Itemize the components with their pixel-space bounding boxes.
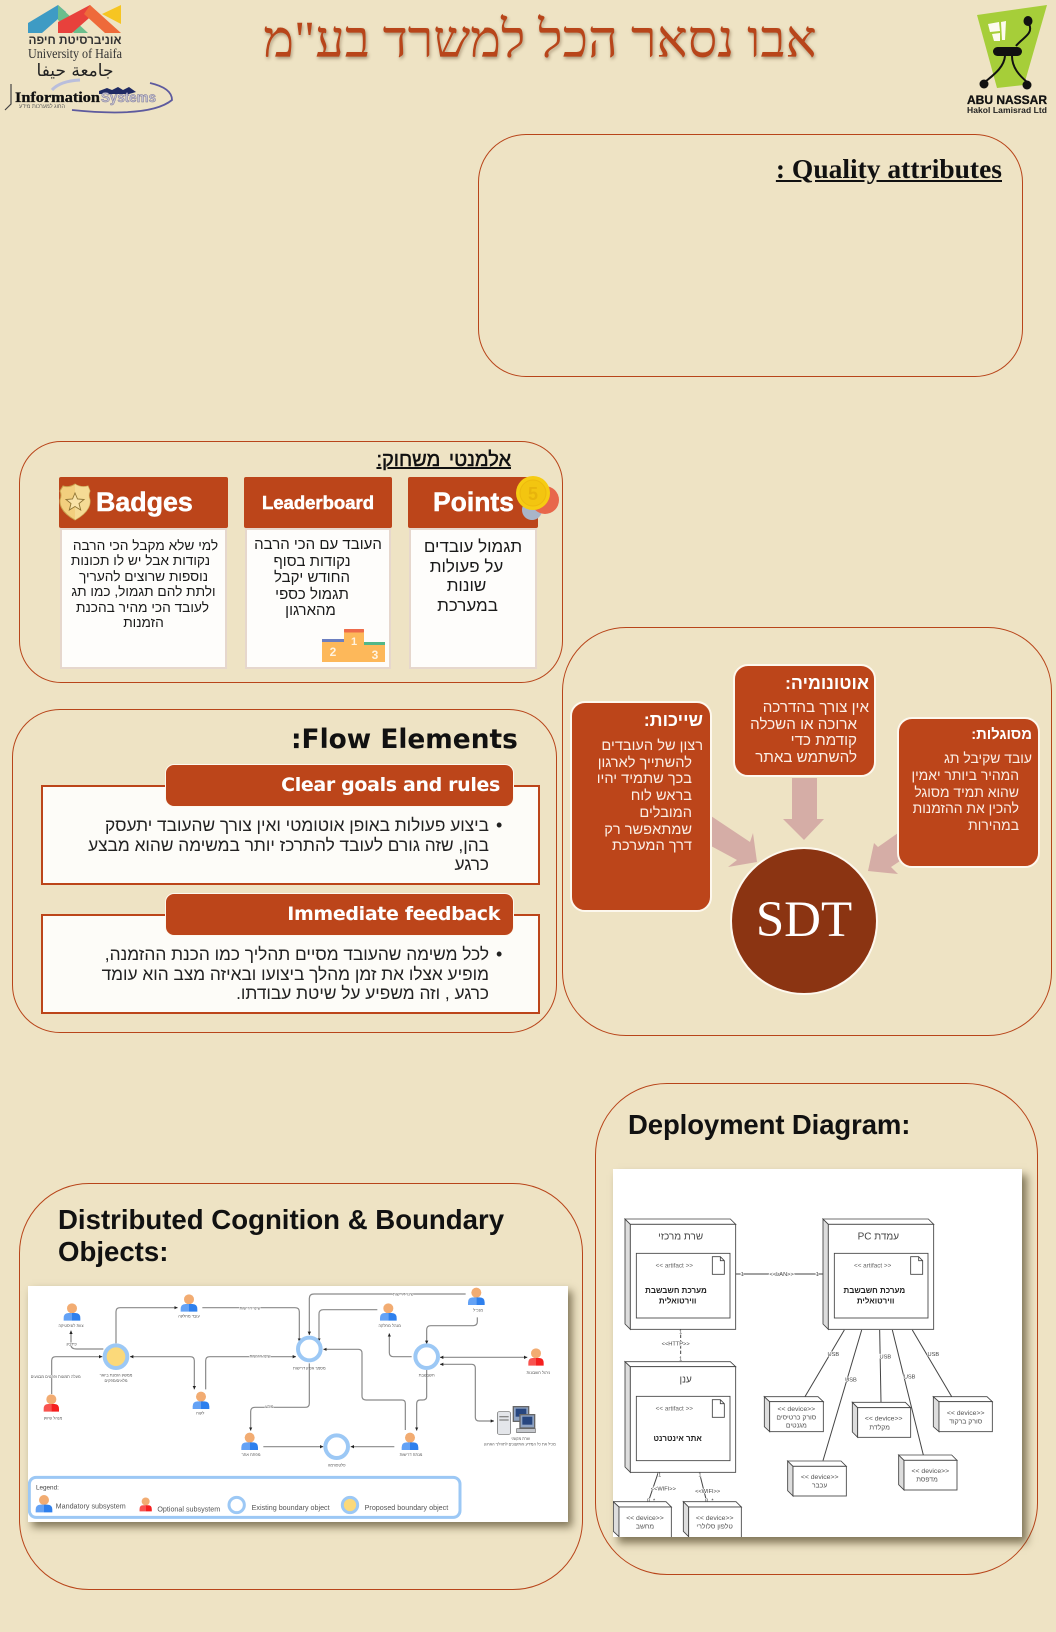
legend: Mandatory subsystem [56, 1503, 126, 1511]
connector labels: <<HTTP>> [662, 1341, 690, 1347]
circle: SDT [730, 847, 878, 995]
connector labels: <<WIFI>> [651, 1486, 677, 1492]
bullet text: immediate feedback: לכל משימה שהעובד מסיים תהליך כמו הכנת ההזמנה, [105, 944, 489, 964]
flow header: clear goals [165, 764, 514, 807]
icon: podium: 1 [351, 636, 357, 648]
heading: game elements: אלמנטי משחוק: [376, 449, 511, 471]
diagram labels: מלאים/ספקים [104, 1378, 128, 1383]
connector labels: <<LAN>> [770, 1272, 794, 1278]
box: motivation: עובד שקיבל תג [944, 750, 1032, 766]
diagram labels: מכיל את כל המידע והתקנונים לתהליך הארגון [484, 1442, 556, 1446]
icon: coins: 5 [528, 484, 538, 504]
device labels: << device>> [947, 1410, 984, 1417]
panel: game elements [19, 441, 563, 683]
box: belonging: דרך המערכת [612, 838, 692, 854]
card body: badges [60, 528, 227, 669]
bullet mark: • [496, 815, 502, 835]
card body: badges: לעובד הכי מהיר בהכנת [76, 600, 209, 615]
card body: badges: הזמנות [123, 615, 164, 630]
diagram labels: ניהול חשבונות [527, 1370, 551, 1375]
device labels: טלפון סלולרי [696, 1523, 733, 1531]
card body: points [409, 528, 537, 669]
connector labels: <<WIFI>> [695, 1489, 721, 1495]
box: belonging: המובלים [639, 805, 692, 821]
connector labels: USB [880, 1354, 891, 1360]
node: central server: מערכת חשבשבת [645, 1286, 707, 1295]
card header: leaderboard [244, 477, 392, 528]
box frame [41, 914, 540, 1014]
card body: leaderboard: תגמול כספי [275, 586, 349, 603]
box: belonging: בראש לוח [631, 788, 692, 804]
diagram labels: פידבק [67, 1341, 77, 1346]
panel: flow elements [12, 709, 557, 1033]
card: badges [59, 477, 228, 669]
card body: badges: נוספות שרוצים להעריך [79, 569, 208, 584]
box: autonomy: ארוכה או השכלה [750, 716, 857, 733]
arrows: into SDT circle [712, 778, 900, 874]
card body: leaderboard: נקודות בסוף [273, 553, 351, 570]
node: central server: ווירטואלית [659, 1297, 696, 1306]
diagram labels: שינוי דרישות [393, 1291, 414, 1296]
bullet text: immediate feedback [102, 944, 489, 1003]
card header: badges [59, 477, 228, 528]
boundary objects [105, 1338, 438, 1458]
logo: Abu Nassar: ABU NASSAR [967, 93, 1047, 107]
node: cloud: אתר אינטרנט [654, 1434, 702, 1443]
card body: badges: נקודות אבל יש לו תכונות [71, 553, 210, 568]
device labels: << device>> [626, 1515, 664, 1522]
icon: podium: 2 [330, 645, 337, 659]
flow header: clear goals: Clear goals and rules [281, 774, 500, 796]
diagram labels [31, 1291, 556, 1467]
card body: leaderboard [245, 528, 391, 669]
title: אבו נסאר הכל למשרד בע"מ [263, 12, 817, 69]
connector labels: USB [928, 1352, 939, 1358]
diagram labels: מפתח אתר [241, 1452, 261, 1457]
logo: University of Haifa: אוניברסיטת חיפה [28, 33, 122, 47]
card body: points: במערכת [437, 596, 498, 615]
heading: quality attributes: : Quality attributes [776, 153, 1002, 184]
people [44, 1288, 544, 1450]
heading: distributed cognition: Distributed Cognition & Boundary [58, 1204, 504, 1235]
icon: server and computers [497, 1407, 535, 1434]
diagram labels: מידע [265, 1404, 274, 1409]
device labels: מחשב [636, 1524, 654, 1531]
device labels: סורק ברקוד [949, 1419, 983, 1426]
box: belonging: בכך שתמיד יהיו [597, 771, 692, 787]
flow box: clear goals [41, 764, 540, 885]
box: autonomy: קודמת כדי [791, 732, 857, 749]
card header: badges: Badges [96, 487, 193, 517]
diagram labels: מנתח דרישות [400, 1452, 423, 1457]
bullet text: clear goals: ביצוע פעולות באופן אוטומטי ואין צורך שהעובד יתעסק [105, 815, 489, 835]
heading: distributed cognition [58, 1204, 504, 1267]
box: motivation: במהירות [968, 817, 1019, 833]
legend: Proposed boundary object [365, 1504, 448, 1512]
box: motivation [897, 717, 1040, 868]
node: cloud: << artifact >> [656, 1405, 693, 1412]
connector labels: 1 [698, 1472, 702, 1478]
legend: Legend: [36, 1485, 59, 1492]
bullet text: clear goals: בהן, שזה גורם לעובד להתרכז יותר במשימה שהוא מבצע [88, 834, 489, 854]
device labels: << device>> [912, 1468, 949, 1475]
bullet text: clear goals: כרגע [455, 854, 489, 874]
node: PC station: << artifact >> [854, 1263, 892, 1270]
legend: Existing boundary object [252, 1504, 330, 1512]
connector labels: 1 [658, 1472, 661, 1478]
device labels: מדפסת [916, 1477, 938, 1484]
legend: Optional subsystem [157, 1506, 220, 1514]
diagram labels: לקוח [196, 1411, 204, 1416]
logo: University of Haifa [28, 5, 123, 80]
icon: badge shield [59, 484, 91, 520]
bullet text: immediate feedback: מופיע אצלו את זמן מהלך ביצועו ובאיזה מצב הוא עומד [102, 964, 489, 984]
connector labels [647, 1272, 939, 1505]
diagram labels: שינוי דרישות [250, 1354, 270, 1359]
panel: quality attributes [478, 134, 1023, 377]
chart: deployment diagram [613, 1169, 1022, 1537]
bullet text: immediate feedback: כרגע , וזה משפיע על שיטת עבודתו. [236, 983, 489, 1003]
box: belonging: להשתייך לארגון [598, 755, 692, 771]
diagram labels: מנהל שיווק [44, 1415, 62, 1420]
node: central server [625, 1219, 736, 1329]
card body: leaderboard: החודש יקבל [274, 569, 350, 586]
diagram labels: שרת מקומי [511, 1436, 530, 1441]
connector labels: USB [904, 1375, 916, 1381]
box: autonomy: להשתמש באתר [755, 749, 857, 766]
logo: Information Systems: Information [15, 90, 101, 106]
diagram labels: פלטפורמה [328, 1462, 346, 1467]
flow box: immediate feedback [41, 893, 540, 1014]
card body: badges: למי שלא מקבל הכי הרבה [73, 538, 218, 553]
box frame [41, 785, 540, 885]
logo: Abu Nassar: Hakol Lamisrad Ltd [967, 105, 1047, 115]
box: belonging: שמתאפשר רק [604, 822, 692, 838]
logo: Information Systems [4, 78, 173, 114]
logo: Information Systems: החוג למערכות מידע [19, 103, 66, 110]
device labels: << device>> [696, 1515, 733, 1522]
connector labels: 1 [816, 1272, 819, 1278]
box: autonomy: אוטונומיה: [785, 673, 869, 693]
box: belonging: רצון של העובדים [601, 738, 703, 754]
connector labels: 1 [741, 1272, 744, 1278]
card body: badges: ולתת להם תגמול, כמו תג [71, 584, 216, 599]
logo: Abu Nassar [967, 5, 1047, 115]
card body: points: על פעולות [430, 557, 503, 576]
card body: leaderboard: העובד עם הכי הרבה [254, 536, 382, 553]
device labels: מקלדת [869, 1423, 890, 1431]
device labels: << device>> [801, 1474, 838, 1481]
diagram labels: מנכ"ל [473, 1307, 483, 1312]
connector labels: 1 [679, 1356, 682, 1362]
node: central server: << artifact >> [656, 1263, 693, 1270]
diagram labels: שינוי דרישות [240, 1306, 260, 1311]
box: belonging: שייכות: [644, 710, 703, 730]
device labels: << device>> [865, 1416, 902, 1423]
box: motivation: להכין את ההזמנות [913, 800, 1019, 816]
device labels: << device>> [778, 1406, 815, 1413]
box: autonomy: אין צורך בהדרכה [763, 699, 869, 716]
diagram labels: מנהל מחלקה [378, 1323, 401, 1328]
logo: Information Systems: Systems [101, 89, 156, 105]
panel: distributed cognition [19, 1183, 583, 1590]
connectors [648, 1274, 952, 1502]
node: PC station: עמדת PC [858, 1232, 899, 1243]
icon: podium: 3 [372, 648, 379, 662]
card: points [408, 477, 538, 669]
heading: deployment: Deployment Diagram: [628, 1109, 910, 1140]
card body: points: תגמול עובדים [424, 537, 522, 556]
node: PC station: מערכת חשבשבת [844, 1286, 905, 1295]
connector labels: USB [845, 1378, 857, 1384]
device labels: מגנטים [786, 1423, 807, 1430]
node: PC station: ווירטואלית [857, 1297, 894, 1306]
diagram labels: מסמך אפיון דרישות [293, 1365, 326, 1370]
connector labels: 0..* [647, 1499, 656, 1505]
card body: leaderboard: מהארגון [285, 602, 336, 619]
box: motivation: מסוגלות: [971, 727, 1032, 743]
node: cloud [625, 1362, 736, 1472]
connector labels: 0..* [705, 1499, 714, 1505]
box: motivation: המהיר ביותר יאמין [911, 767, 1019, 783]
box: belonging [570, 701, 712, 912]
diagram labels: עובד מחלקה [178, 1314, 200, 1319]
flow header: immediate feedback [165, 893, 514, 936]
diagram labels: מעלה תמונות ופרטים מבצעים [31, 1374, 81, 1379]
connector labels: 1 [679, 1329, 682, 1335]
flow header: immediate feedback: Immediate feedback [287, 903, 500, 925]
diagram labels: צוות לוגיסטיקה [58, 1323, 84, 1328]
box: autonomy [733, 664, 876, 777]
bullet mark: • [496, 944, 502, 964]
node: PC station [823, 1219, 934, 1329]
node: cloud: ענן [680, 1375, 692, 1386]
card: leaderboard [244, 477, 392, 669]
panel: deployment [595, 1083, 1038, 1575]
circle: SDT: SDT [756, 892, 852, 948]
node: central server: שרת מרכזי [658, 1232, 703, 1243]
panel: SDT [562, 627, 1052, 1036]
icon: coins [516, 476, 559, 520]
heading: flow elements: :Flow Elements [291, 724, 518, 755]
device nodes [613, 1397, 992, 1538]
device labels [626, 1406, 984, 1531]
device labels: עכבר [812, 1483, 827, 1490]
card header: points: Points [433, 487, 514, 517]
card header: points [408, 477, 538, 528]
card body: points: שונות [447, 576, 486, 595]
device labels: סורק כרטיסים [776, 1415, 817, 1422]
legend [29, 1477, 460, 1517]
card header: leaderboard: Leaderboard [262, 492, 374, 512]
bullet text: clear goals [88, 815, 489, 874]
diagram labels: חשבשבת [419, 1373, 435, 1378]
connectors [52, 1294, 527, 1447]
icon: podium [322, 629, 385, 662]
diagram labels: ממשק הזמנת ביואר [100, 1372, 133, 1377]
heading: distributed cognition: Objects: [58, 1236, 168, 1267]
chart: distributed cognition diagram [28, 1286, 568, 1522]
connector labels: USB [828, 1352, 839, 1358]
box: motivation: שהוא תמיד מסוגל [914, 784, 1019, 800]
